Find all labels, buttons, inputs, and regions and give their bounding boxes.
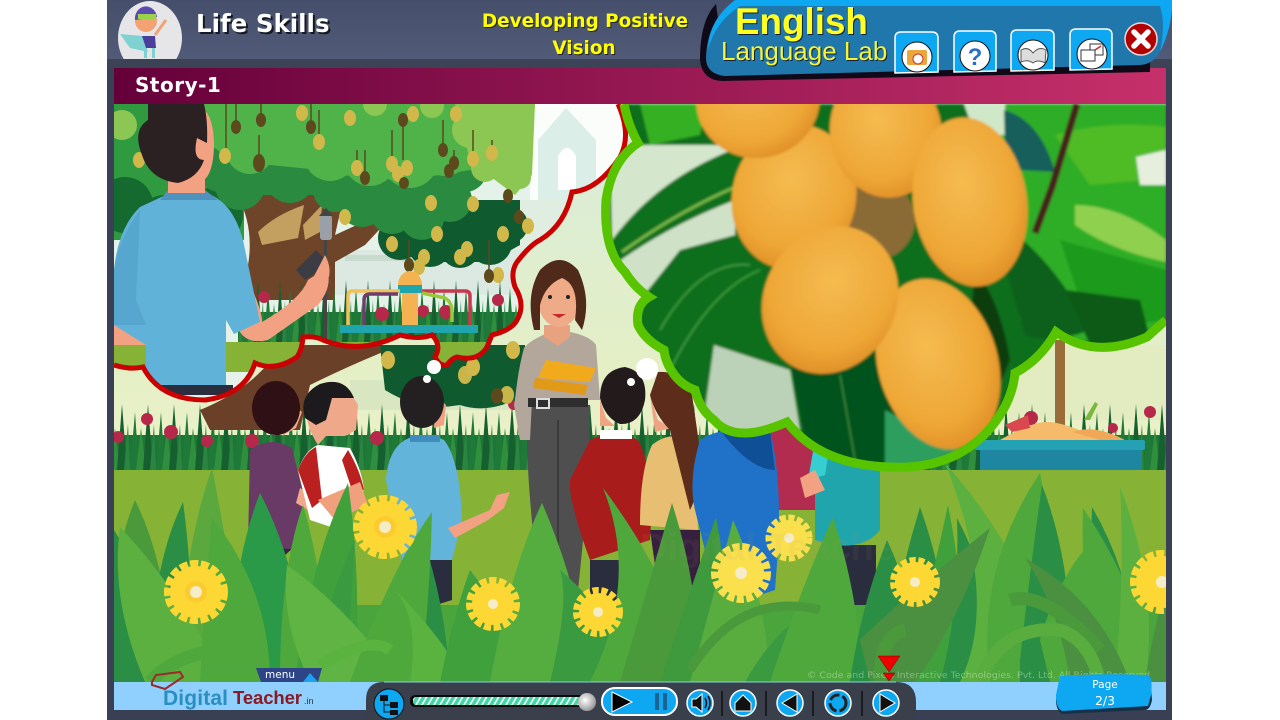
button: next (873, 690, 899, 716)
logo: Digital Teacher: Teacher (233, 687, 302, 708)
flower 8 (1130, 550, 1166, 614)
button: home (730, 690, 756, 716)
panel: English Language Lab header (700, 0, 1172, 81)
panel: green thought bubble with mango photo (601, 104, 1166, 472)
heading: lesson title: Vision (552, 38, 616, 59)
hanging mangoes (133, 104, 534, 283)
heading: lesson title (482, 11, 689, 60)
progress bar (410, 693, 596, 711)
child: crimson shirt (770, 428, 815, 510)
panel: red thought bubble (97, 92, 634, 404)
bottom bar (114, 682, 1166, 720)
man throwing a stone (114, 104, 330, 395)
heading: Life Skills: Life Skills (198, 11, 332, 40)
mangoes (694, 104, 1030, 452)
page indicator: 2/3 (1095, 693, 1115, 708)
foreground grass (112, 463, 1166, 682)
heading: lesson title: Developing Positive (483, 12, 689, 33)
button: sound (687, 690, 713, 716)
story scene (114, 104, 1166, 682)
flower 2 (357, 499, 413, 555)
menu tab (256, 668, 322, 682)
thought dots (423, 358, 658, 386)
child: light blue shirt (386, 376, 510, 610)
page indicator: Page (1092, 679, 1118, 691)
avatar badge (118, 1, 182, 75)
child: yellow sweater and ponytail (640, 372, 701, 600)
heading: English: English (735, 1, 868, 42)
logo: Digital Teacher: Digital (163, 687, 228, 710)
flower 5 (715, 547, 767, 599)
play and pause control (602, 688, 677, 715)
logo: Digital Teacher (152, 672, 314, 710)
menu tab: menu (265, 669, 295, 681)
hedge inside bubble (238, 312, 522, 342)
page indicator (1056, 674, 1152, 714)
lawn inside bubble (114, 342, 514, 372)
child: red and white vest (298, 382, 368, 530)
heading: lesson title: Vision (553, 39, 617, 60)
lawn (114, 470, 1166, 605)
child: teal shirt (800, 451, 880, 605)
child: blue hoodie (692, 429, 779, 600)
teacher (514, 260, 600, 590)
button: replay (825, 690, 851, 716)
tree trunk (244, 195, 380, 300)
button: close (1125, 23, 1157, 55)
flower 7 (894, 561, 936, 603)
tree canopy (114, 104, 535, 268)
button: windows (1070, 29, 1112, 70)
photo leaves, right side (990, 104, 1166, 345)
carousel (340, 271, 478, 333)
flower 6 (769, 518, 809, 558)
background hedge with flowers (112, 398, 1166, 470)
story title bar: Story-1 (135, 73, 221, 97)
button: back (777, 690, 803, 716)
copyright: © Code and Pixels Interactive Technologies. Pvt. Ltd. All Rights Reserved (807, 671, 1150, 681)
faint watermark: Digital Teacher (640, 527, 910, 569)
button: help: ? (968, 44, 982, 71)
button: history folder (895, 32, 938, 73)
yellow flowers (168, 499, 1190, 633)
lamp post (319, 208, 333, 340)
button: book (1011, 30, 1054, 71)
background sky and buildings (114, 104, 1166, 435)
heading: English: English (736, 2, 869, 43)
child: purple shirt (248, 381, 308, 555)
flower 3 (470, 581, 516, 627)
group of children and teacher (248, 260, 880, 610)
sand box (975, 340, 1145, 470)
heading: Life Skills: Life Skills (196, 9, 330, 38)
lower tree behind the red bubble (200, 341, 525, 430)
logo: Digital Teacher: .in (304, 696, 314, 706)
dividers (722, 691, 862, 716)
story title bar (114, 68, 1166, 104)
button: tree menu (374, 689, 404, 719)
button: help (954, 31, 996, 72)
heading: Language Lab: Language Lab (721, 36, 887, 66)
child: red sweater (570, 367, 651, 610)
photo leaves, left side (640, 104, 706, 145)
red marker arrows (878, 656, 900, 681)
heading: Language Lab: Language Lab (722, 37, 888, 67)
flower 1 (168, 564, 224, 620)
heading: lesson title: Developing Positive (482, 11, 688, 32)
flower 4 (577, 591, 619, 633)
